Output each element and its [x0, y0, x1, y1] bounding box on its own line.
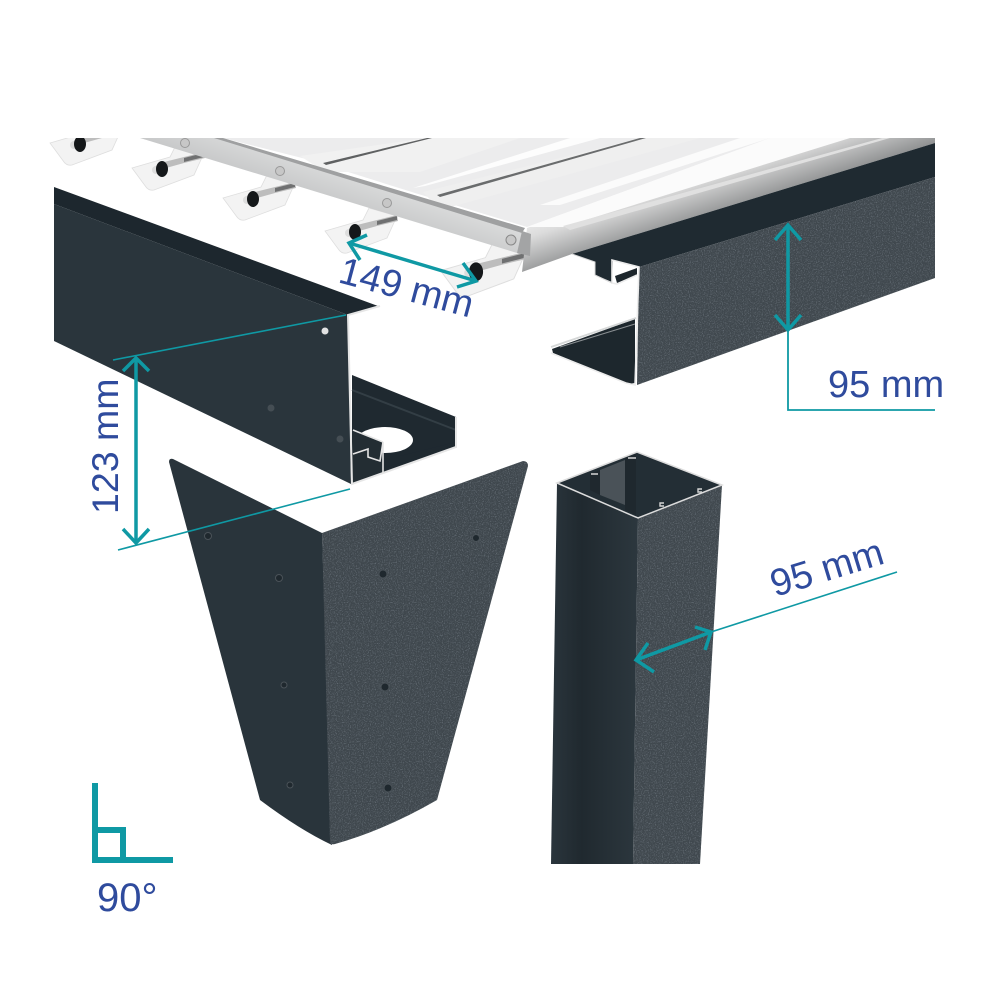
dimension: 95 mm post: 95 mm — [765, 531, 889, 606]
dimension: 95 mm post — [636, 531, 897, 672]
corner bracket — [169, 459, 528, 845]
slat ends with black knobs — [50, 138, 524, 297]
dimension: 149 mm: 149 mm — [335, 250, 478, 326]
dimension: 95 mm beam: 95 mm — [828, 364, 944, 406]
front gutter slat — [522, 138, 935, 272]
square post — [551, 452, 722, 864]
dimension: 95 mm beam — [775, 225, 944, 410]
dimension: 123 mm — [84, 315, 350, 550]
right angle symbol: 90°: 90° — [97, 876, 158, 920]
right beam — [551, 143, 935, 385]
aluminium rail with bolts — [140, 138, 531, 256]
right angle symbol: 90° — [95, 783, 173, 920]
roof slats — [223, 138, 770, 227]
left beam — [54, 187, 456, 484]
dimension: 123 mm: 123 mm — [84, 379, 126, 514]
